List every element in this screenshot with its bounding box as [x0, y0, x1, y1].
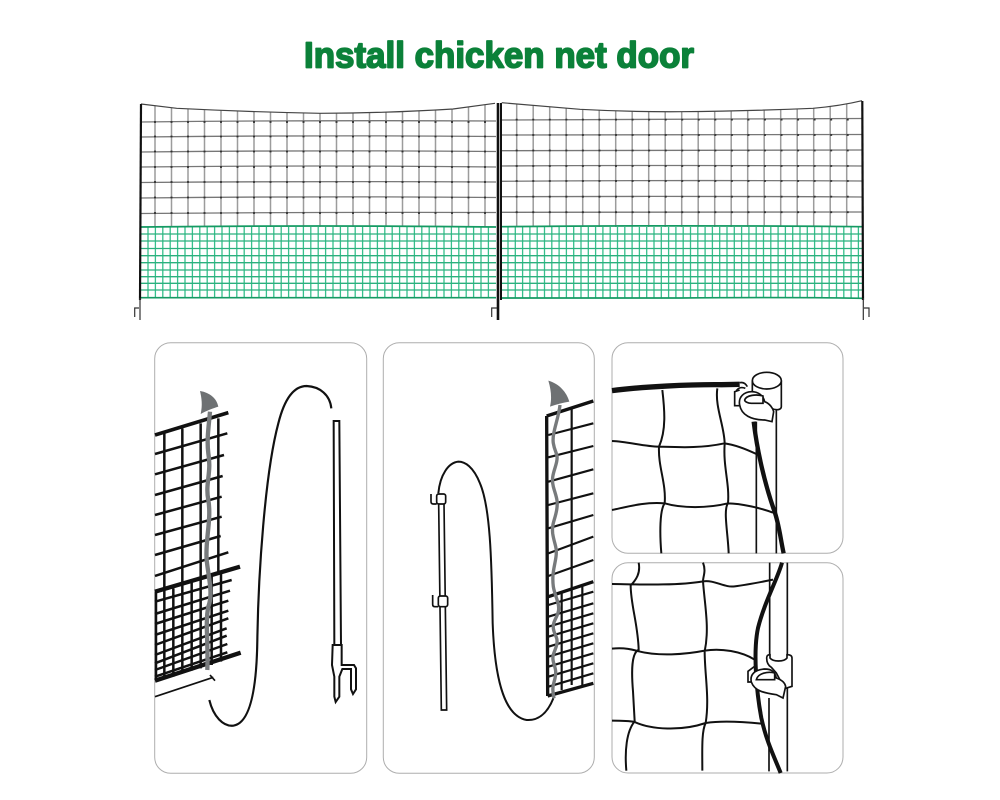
net fragment — [155, 413, 241, 697]
net section: left — [141, 104, 496, 298]
grey threading rod with arrow head — [548, 381, 569, 698]
pole cap — [752, 372, 781, 410]
post: left — [140, 104, 141, 300]
pole — [769, 563, 787, 771]
panel: detail top clip — [612, 343, 843, 553]
looping cord — [438, 462, 553, 720]
pole — [756, 408, 776, 553]
clip — [748, 666, 786, 698]
panel: step 2 cord attached to pole — [383, 343, 594, 773]
post: right — [861, 101, 864, 300]
looping cord — [209, 386, 331, 726]
panel: step 1 threading net cord — [155, 343, 367, 773]
net fragment — [547, 401, 593, 696]
panel: detail lower clip — [612, 563, 843, 773]
net mesh — [612, 388, 773, 553]
net section: right — [501, 100, 862, 298]
grey threading rod with arrow head — [200, 391, 218, 670]
fence diagram: two net sections — [135, 100, 869, 320]
pole with forked foot — [332, 421, 356, 702]
pole with clips — [431, 494, 448, 710]
thick cord — [754, 422, 784, 553]
clip — [735, 390, 774, 422]
title: Install chicken net door — [304, 34, 694, 75]
thick top rope — [612, 384, 740, 391]
clip ring and body — [767, 655, 792, 689]
post: middle — [497, 103, 499, 320]
thick cord — [756, 563, 782, 773]
net mesh — [612, 563, 773, 771]
top cords — [141, 101, 862, 113]
